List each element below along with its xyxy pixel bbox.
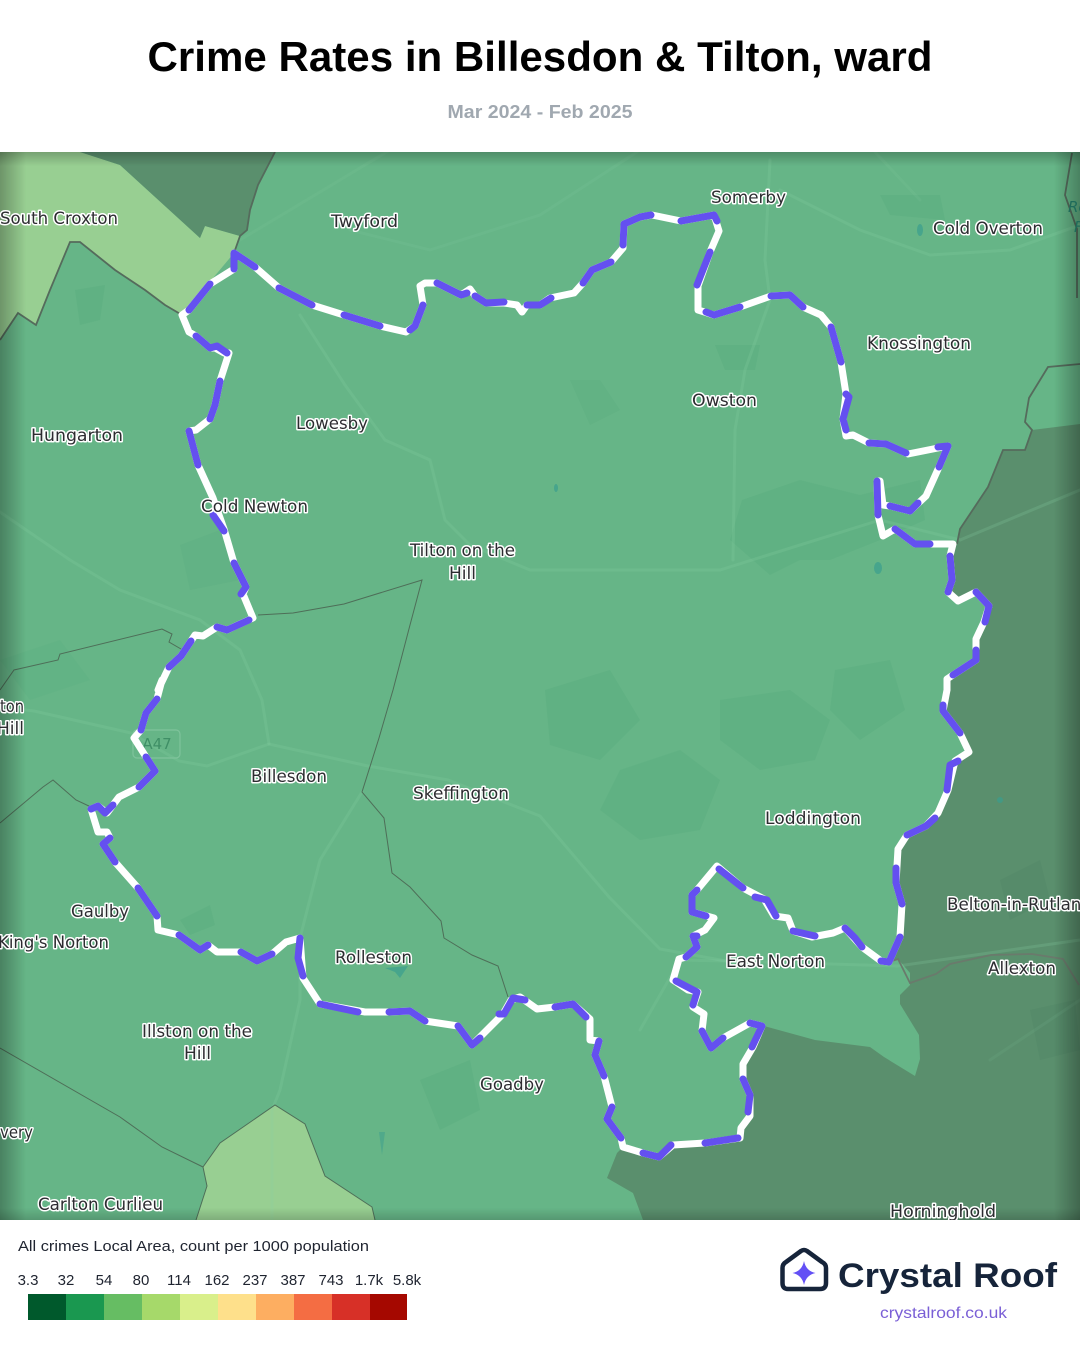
legend tick values bbox=[18, 1272, 422, 1289]
brand logo: Crystal Roof bbox=[782, 1250, 1058, 1322]
legend tick values: 32 bbox=[58, 1272, 74, 1289]
title: Crime Rates in Billesdon & Tilton, ward bbox=[148, 33, 933, 80]
label: Goadby: Goadby bbox=[480, 1075, 544, 1095]
label: Gaulby: Gaulby bbox=[71, 902, 129, 922]
legend tick values: 237 bbox=[242, 1272, 268, 1289]
boundary white base line bbox=[91, 215, 989, 1157]
place labels bbox=[0, 188, 1080, 1222]
label: Owston: Owston bbox=[692, 391, 757, 411]
label: Allexton: Allexton bbox=[988, 959, 1056, 979]
website url: crystalroof.co.uk bbox=[880, 1305, 1008, 1322]
label: Cold Overton: Cold Overton bbox=[933, 219, 1043, 239]
label: Loddington: Loddington bbox=[765, 809, 861, 829]
choropleth map panel bbox=[0, 150, 1080, 1222]
region: light green north-west bbox=[0, 152, 240, 340]
label: Skeffington: Skeffington bbox=[413, 784, 509, 804]
wordmark: Crystal Roof bbox=[838, 1257, 1058, 1295]
legend tick values: 743 bbox=[318, 1272, 344, 1289]
label: Illston on the Hill: Illston on the bbox=[142, 1022, 252, 1042]
region: dark green south-east bbox=[607, 424, 1080, 1220]
legend tick values: 3.3 bbox=[18, 1272, 38, 1289]
label: Twyford: Twyford bbox=[330, 212, 398, 232]
legend tick values: 114 bbox=[167, 1272, 191, 1289]
region: dark green north bbox=[80, 152, 275, 238]
road badge: A47 bbox=[133, 730, 180, 758]
region: light green south bbox=[196, 1105, 375, 1220]
label: South Croxton: South Croxton bbox=[0, 209, 118, 229]
legend: all crimes colour scale bbox=[18, 1238, 422, 1320]
label: Illston on the Hill: Hill bbox=[184, 1044, 211, 1064]
map base area bbox=[0, 152, 1080, 1220]
label: clipped place name at left edge: ton bbox=[0, 697, 24, 717]
road badge: A47: A47 bbox=[142, 735, 172, 753]
label: Hungarton: Hungarton bbox=[31, 426, 123, 446]
label: Billesdon: Billesdon bbox=[251, 767, 327, 787]
roads bbox=[268, 345, 1080, 966]
icon: house with star bbox=[782, 1250, 826, 1289]
legend tick values: 54 bbox=[96, 1272, 112, 1289]
water spots bbox=[379, 224, 1003, 1155]
label: Tilton on the Hill: Hill bbox=[449, 564, 476, 584]
label: King's Norton: King's Norton bbox=[0, 933, 109, 953]
thin admin borders bbox=[0, 580, 508, 1220]
subtitle: date range: Mar 2024 - Feb 2025 bbox=[448, 102, 632, 122]
ward boundary: Billesdon and Tilton bbox=[91, 215, 989, 1157]
label: Somerby: Somerby bbox=[711, 188, 786, 208]
legend tick values: 80 bbox=[133, 1272, 149, 1289]
legend tick values: 387 bbox=[280, 1272, 306, 1289]
label: Rolleston: Rolleston bbox=[335, 948, 412, 968]
label: Knossington: Knossington bbox=[867, 334, 971, 354]
label: Tilton on the Hill: Tilton on the bbox=[409, 541, 515, 561]
label: clipped place name ending very: very bbox=[0, 1123, 33, 1143]
label: Horninghold: Horninghold bbox=[890, 1202, 996, 1222]
region edge shading bbox=[0, 152, 1080, 1220]
thick region borders bbox=[0, 152, 1080, 985]
woodland patches bbox=[0, 195, 1080, 1130]
legend tick values: 1.7k bbox=[355, 1272, 384, 1289]
label: East Norton: East Norton bbox=[726, 952, 825, 972]
legend tick values: 5.8k bbox=[393, 1272, 422, 1289]
legend tick values: 162 bbox=[204, 1272, 230, 1289]
legend colour swatches bbox=[28, 1294, 407, 1320]
boundary purple dashes bbox=[91, 215, 989, 1157]
label: Carlton Curlieu: Carlton Curlieu bbox=[38, 1195, 163, 1215]
label: Cold Newton: Cold Newton bbox=[201, 497, 308, 517]
legend title: All crimes Local Area, count per 1000 population bbox=[18, 1238, 369, 1255]
label: Lowesby: Lowesby bbox=[296, 414, 368, 434]
